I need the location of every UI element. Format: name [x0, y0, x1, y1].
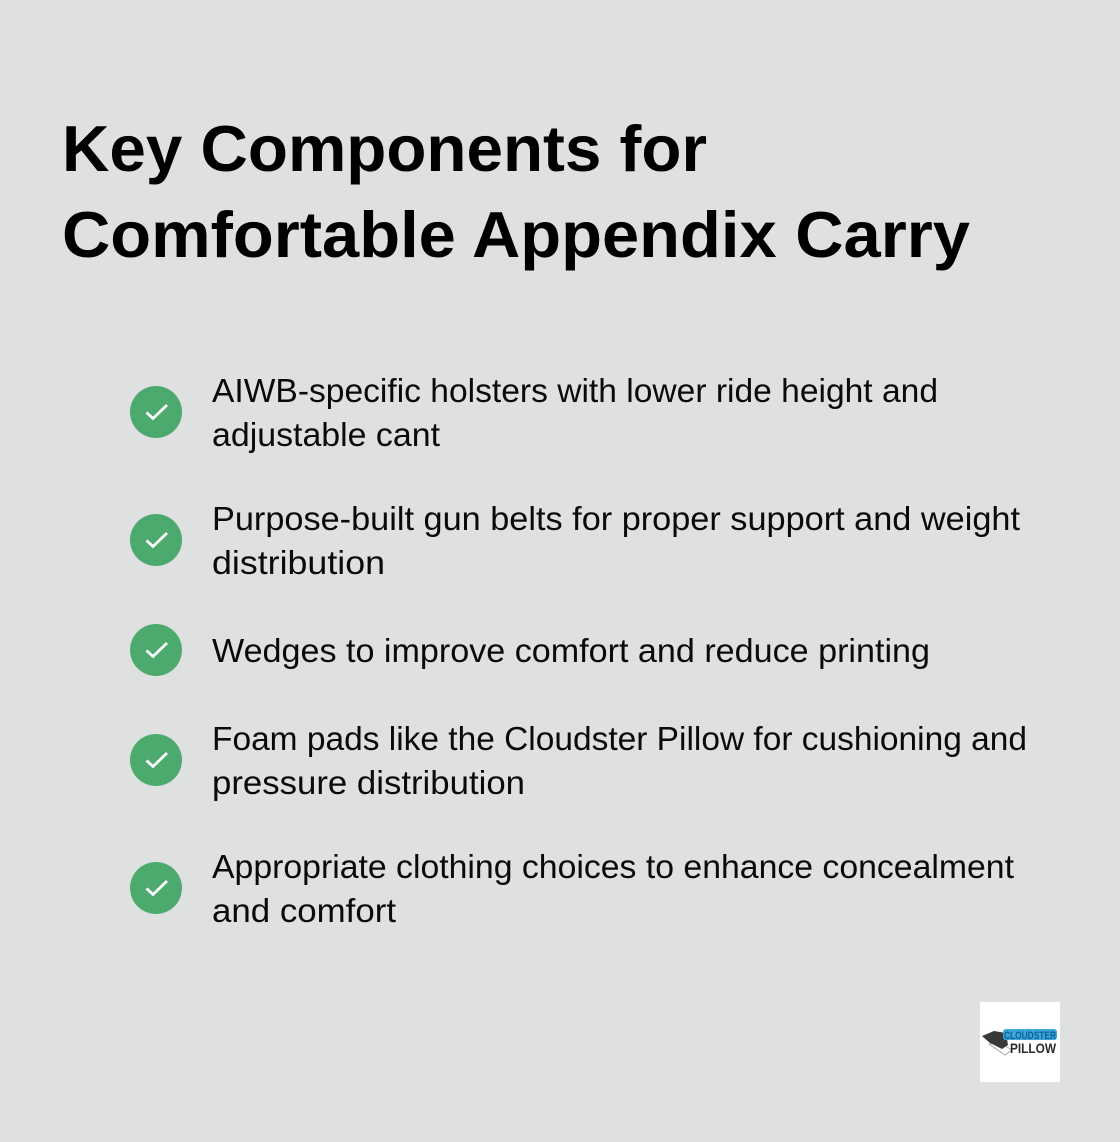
item 1: holsters	[130, 372, 938, 453]
text: holsters	[212, 372, 938, 453]
text: foam pads: Foam pads like the Cloudster Pillow for cushioning and	[212, 720, 1027, 757]
title: Comfortable Appendix Carry	[62, 198, 970, 271]
text: foam pads	[212, 720, 1027, 801]
checklist	[130, 372, 1027, 929]
text: clothing: Appropriate clothing choices to enhance concealment	[212, 848, 1014, 885]
icon: pillow	[982, 1031, 1012, 1055]
text: holsters: adjustable cant	[212, 416, 440, 453]
logo wordmark	[1003, 1029, 1057, 1056]
text: gun belts: distribution	[212, 544, 385, 581]
item 3: wedges	[130, 624, 930, 676]
icon: check circle	[130, 514, 182, 566]
icon: check circle	[130, 862, 182, 914]
item 4: foam pads	[130, 720, 1027, 801]
item 2: gun belts	[130, 500, 1020, 581]
logo wordmark: CLOUDSTER	[1004, 1030, 1056, 1042]
icon: check circle	[130, 624, 182, 676]
text: clothing: and comfort	[212, 892, 396, 929]
logo: Cloudster Pillow	[980, 1002, 1060, 1082]
icon: check circle	[130, 734, 182, 786]
text: wedges: Wedges to improve comfort and reduce printing	[212, 632, 930, 669]
text: clothing	[212, 848, 1014, 929]
text: gun belts	[212, 500, 1020, 581]
text: foam pads: pressure distribution	[212, 764, 525, 801]
text: holsters: AIWB-specific holsters with lower ride height and	[212, 372, 938, 409]
icon: check circle	[130, 386, 182, 438]
item 5: clothing	[130, 848, 1014, 929]
title	[62, 112, 970, 271]
logo wordmark: PILLOW	[1010, 1040, 1057, 1056]
title: Key Components for	[62, 112, 707, 185]
text: gun belts: Purpose-built gun belts for proper support and weight	[212, 500, 1020, 537]
